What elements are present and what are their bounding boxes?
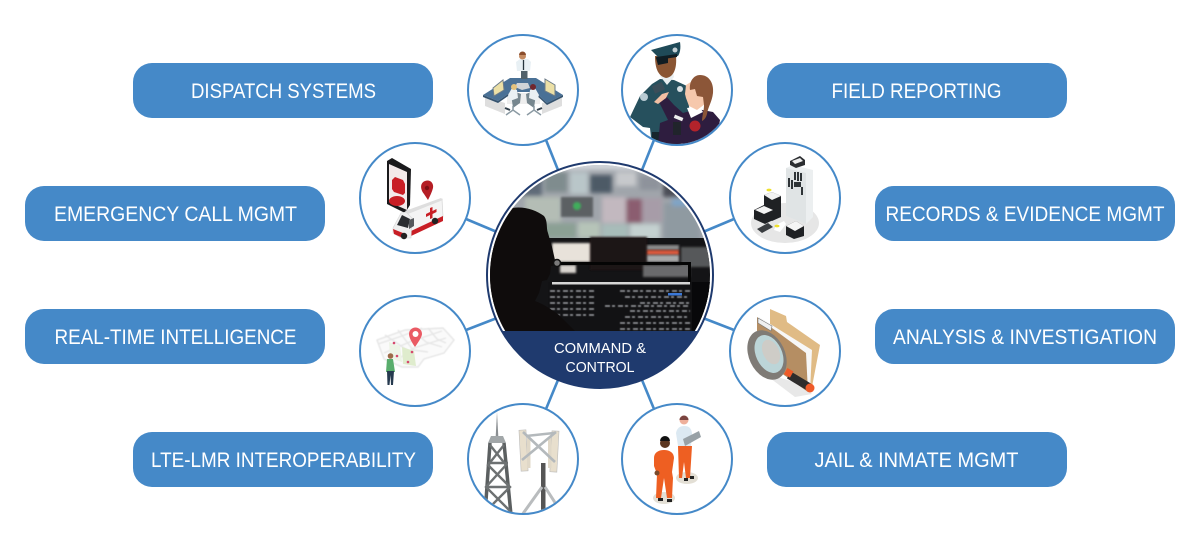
pill: emergency call management: EMERGENCY CALL MGMT xyxy=(54,203,297,226)
inmate in orange jumpsuit xyxy=(654,436,674,502)
pill: jail and inmate management xyxy=(767,432,1067,487)
seated operators xyxy=(505,84,521,115)
pill: records and evidence management xyxy=(875,186,1175,241)
icon: police officer and civilian xyxy=(622,35,732,146)
pill: analysis and investigation xyxy=(875,309,1175,364)
phone xyxy=(387,158,411,213)
pill: jail and inmate management: JAIL & INMATE MGMT xyxy=(814,449,1019,472)
magnifier xyxy=(740,324,814,392)
pill: real-time intelligence xyxy=(25,309,325,364)
caption band: CONTROL xyxy=(566,360,634,376)
icon: dispatch desk xyxy=(468,35,578,145)
photo: monitor xyxy=(550,282,710,331)
pill: emergency call management xyxy=(25,186,325,241)
standing inmate with clipboard xyxy=(676,416,701,481)
standing person xyxy=(516,52,531,79)
map pin xyxy=(421,180,433,200)
photo: operator silhouette xyxy=(490,208,562,331)
icon: ambulance and phone xyxy=(360,143,470,253)
pill: analysis and investigation: ANALYSIS & INVESTIGATION xyxy=(893,326,1157,349)
pill: dispatch systems: DISPATCH SYSTEMS xyxy=(191,80,376,103)
icon: folder and magnifier xyxy=(730,296,840,406)
pill: LTE-LMR interoperability xyxy=(133,432,433,487)
person xyxy=(386,353,395,385)
caption band xyxy=(503,331,697,387)
pill: LTE-LMR interoperability: LTE-LMR INTEROPERABILITY xyxy=(151,449,416,472)
icon: records and filing xyxy=(730,143,840,253)
icon: radio towers xyxy=(468,404,578,515)
pill: dispatch systems xyxy=(133,63,433,118)
icon: map with person xyxy=(360,296,470,406)
ambulance xyxy=(393,198,443,239)
pill: field reporting xyxy=(767,63,1067,118)
pill: field reporting: FIELD REPORTING xyxy=(832,80,1002,103)
officer xyxy=(630,79,690,146)
central circle: command and control xyxy=(480,155,720,391)
civilian xyxy=(658,95,720,145)
caption band: COMMAND & xyxy=(554,341,646,357)
icon: inmates xyxy=(622,404,732,514)
pill: real-time intelligence: REAL-TIME INTELLIGENCE xyxy=(54,326,296,349)
monitors xyxy=(493,79,555,96)
pill: records and evidence management: RECORDS & EVIDENCE MGMT xyxy=(886,203,1165,226)
connector lines xyxy=(466,140,734,409)
photo: control room background xyxy=(490,165,710,331)
map pin xyxy=(409,328,422,347)
